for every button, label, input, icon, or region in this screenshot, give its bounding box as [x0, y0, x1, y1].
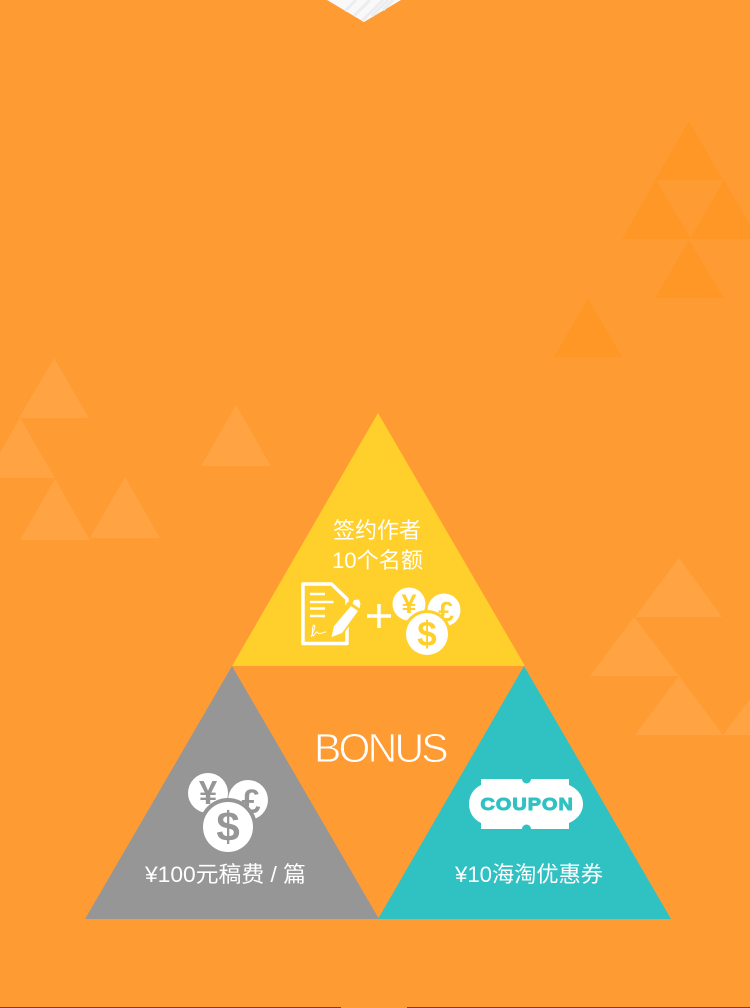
icon: coupon ticket: COUPON	[480, 795, 574, 815]
icon: coins on yellow: $	[417, 615, 437, 654]
text: teal triangle caption: ¥10海淘优惠券	[454, 862, 603, 887]
icon: coins on gray: $	[216, 803, 240, 850]
panel: gray triangle	[85, 666, 379, 919]
heading: BONUS: BONUS	[314, 725, 447, 771]
decorative triangles: upper right darker	[554, 121, 750, 357]
icon: coins on yellow: £	[438, 596, 454, 627]
bottom edge line	[0, 1007, 750, 1008]
icon: coupon ticket	[469, 779, 583, 829]
icon: plus	[367, 604, 391, 628]
icon: signed document with pen	[303, 584, 360, 644]
panel: teal triangle	[378, 666, 671, 919]
panel: yellow triangle	[232, 413, 525, 666]
decorative triangles: right lighter	[590, 558, 750, 735]
heading: contract authors: 签约作者	[333, 518, 421, 543]
icon: coins on yellow: ¥	[401, 589, 417, 619]
text: ten places: 10个名额	[332, 548, 423, 573]
icon: coins on gray: £	[242, 783, 261, 821]
icon: coins on yellow	[392, 588, 460, 658]
icon: coins on gray	[188, 773, 268, 856]
top ribbon tip	[327, 0, 401, 22]
text: gray triangle caption: ¥100元稿费 / 篇	[144, 862, 306, 887]
icon: coins on gray: ¥	[199, 774, 218, 811]
decorative triangles: left lighter	[0, 358, 271, 540]
